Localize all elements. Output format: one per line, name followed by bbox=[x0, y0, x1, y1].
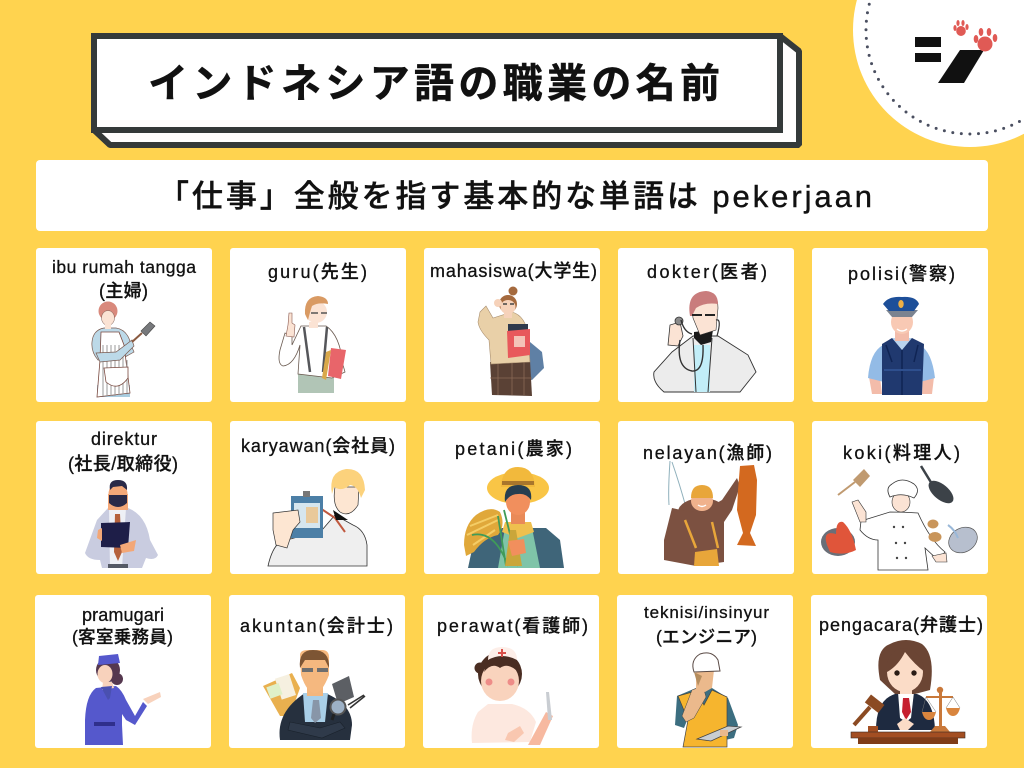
label: nelayan(漁師) bbox=[643, 443, 772, 463]
label: perawat(看護師) bbox=[437, 616, 588, 636]
panel: koki bbox=[812, 421, 988, 574]
icon: flight attendant bbox=[85, 654, 161, 745]
label: direktur bbox=[91, 429, 157, 449]
label: japanese: (エンジニア) bbox=[656, 627, 757, 647]
icon: nurse bbox=[472, 647, 553, 745]
label: guru(先生) bbox=[268, 262, 367, 282]
label: japanese: (客室乗務員) bbox=[72, 627, 173, 647]
label: dokter(医者) bbox=[647, 262, 767, 282]
panel: petani bbox=[424, 421, 600, 574]
icon: chef bbox=[821, 466, 982, 570]
label: akuntan(会計士) bbox=[240, 616, 393, 636]
label: petani(農家) bbox=[455, 439, 572, 459]
panel: perawat bbox=[423, 595, 599, 748]
panel: dokter bbox=[618, 248, 794, 402]
label: koki(料理人) bbox=[843, 443, 960, 463]
label: karyawan(会社員) bbox=[241, 436, 395, 456]
icon: doctor bbox=[654, 291, 756, 392]
label: japanese: (主婦) bbox=[99, 281, 148, 301]
icon: office worker with id card bbox=[268, 469, 367, 566]
subtitle text: 「仕事」全般を指す基本的な単語は pekerjaan bbox=[158, 179, 872, 214]
panel: akuntan bbox=[229, 595, 405, 748]
title box bbox=[94, 36, 799, 145]
panel: mahasiswa bbox=[424, 248, 600, 402]
icon: fisherman bbox=[664, 461, 757, 566]
label: pengacara(弁護士) bbox=[819, 615, 983, 635]
panel: direktur bbox=[36, 421, 212, 574]
panel: polisi bbox=[812, 248, 988, 402]
panel: teknisi bbox=[617, 595, 793, 748]
panel: pengacara bbox=[811, 595, 987, 748]
panel: pramugari bbox=[35, 595, 211, 748]
title: インドネシア語の職業の名前 bbox=[148, 62, 720, 106]
icon: student bbox=[478, 286, 544, 396]
icon: engineer bbox=[675, 653, 741, 747]
label: teknisi/insinyur bbox=[644, 603, 769, 622]
logo badge bbox=[853, 0, 1024, 147]
label: japanese: (社長/取締役) bbox=[68, 454, 178, 474]
panel: subtitle bbox=[36, 160, 988, 231]
icon: lawyer bbox=[851, 640, 965, 744]
label: polisi(警察) bbox=[848, 264, 955, 284]
icon: teacher bbox=[279, 296, 346, 393]
label: mahasiswa(大学生) bbox=[430, 261, 597, 281]
icon: housewife bbox=[92, 302, 155, 397]
panel: karyawan bbox=[230, 421, 406, 574]
icon: director bbox=[85, 480, 158, 568]
label: ibu rumah tangga bbox=[52, 257, 196, 277]
panel: nelayan bbox=[618, 421, 794, 574]
icon: farmer bbox=[464, 467, 564, 568]
panel: ibu rumah tangga bbox=[36, 248, 212, 402]
panel: guru bbox=[230, 248, 406, 402]
label: pramugari bbox=[82, 605, 164, 625]
icon: accountant bbox=[263, 650, 365, 740]
icon: police officer bbox=[868, 297, 935, 395]
